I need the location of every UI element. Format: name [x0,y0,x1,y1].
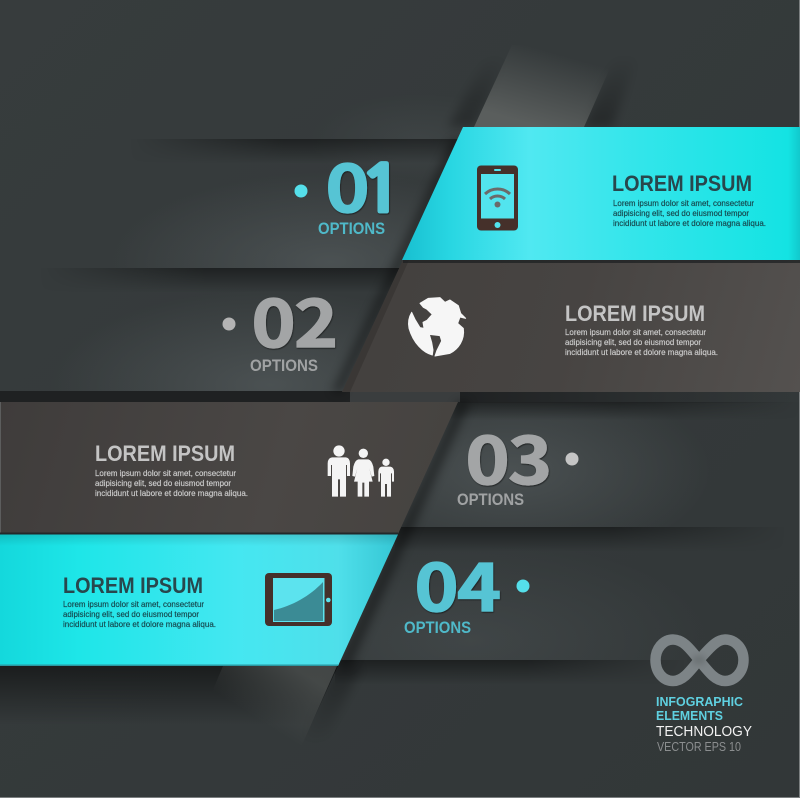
option 03: 03 [466,410,552,503]
panel: band 4 [0,534,398,666]
text: infographic elements technology: VECTOR EPS 10 [657,740,741,754]
option 01 [294,138,404,238]
text: band 3 [95,468,248,498]
text: band 1 [613,198,766,228]
text: band 1: incididunt ut labore et dolore magna aliqua. [613,218,766,228]
option 02: 02 [252,273,338,366]
option 04: OPTIONS [404,619,471,637]
text: infographic elements technology [656,694,752,754]
text: band 4: adipisicing elit, sed do eiusmod tempor [63,609,199,619]
option 02: OPTIONS [250,357,318,375]
text: band 3: adipisicing elit, sed do eiusmod tempor [95,478,231,488]
text: band 3: incididunt ut labore et dolore magna aliqua. [95,488,248,498]
option 01: 1 [359,158,404,222]
heading: band 1: LOREM IPSUM [612,171,752,196]
text: infographic elements technology: ELEMENTS [656,708,723,723]
icon: globe [408,298,466,356]
panel: band 3 [0,402,458,534]
heading: band 4: LOREM IPSUM [63,573,203,598]
text: band 1: Lorem ipsum dolor sit amet, consectetur [613,198,754,208]
icon: tablet [265,573,332,626]
panel: band 1 [402,127,800,260]
heading: band 3: LOREM IPSUM [95,441,235,466]
text: band 2: incididunt ut labore et dolore magna aliqua. [565,347,718,357]
text: infographic elements technology: TECHNOLOGY [656,723,752,740]
text: band 4: Lorem ipsum dolor sit amet, consectetur [63,599,204,609]
icon: family [328,445,394,497]
heading: band 2: LOREM IPSUM [565,301,705,326]
diagonal band bottom [0,666,362,745]
option 03 [457,410,578,509]
option 03: OPTIONS [457,491,524,509]
text: band 2: adipisicing elit, sed do eiusmod tempor [565,337,701,347]
option 04: 04 [414,537,501,630]
icon: infinity symbol [656,640,744,681]
diagonal band top [448,45,640,127]
panel: band 2 [342,260,800,392]
text: band 3: Lorem ipsum dolor sit amet, consectetur [95,468,236,478]
option 04 [404,537,530,637]
band shadows [332,139,470,666]
option 01: 0 [326,138,370,231]
text: band 2 [565,327,718,357]
text: band 4 [63,599,216,629]
option 01: OPTIONS [318,220,385,238]
text: band 1: adipisicing elit, sed do eiusmod tempor [613,208,749,218]
option 02 [222,273,338,375]
text: band 2: Lorem ipsum dolor sit amet, consectetur [565,327,706,337]
icon: phone with wifi [477,166,518,230]
text: infographic elements technology: INFOGRAPHIC [656,694,744,709]
text: band 4: incididunt ut labore et dolore magna aliqua. [63,619,216,629]
